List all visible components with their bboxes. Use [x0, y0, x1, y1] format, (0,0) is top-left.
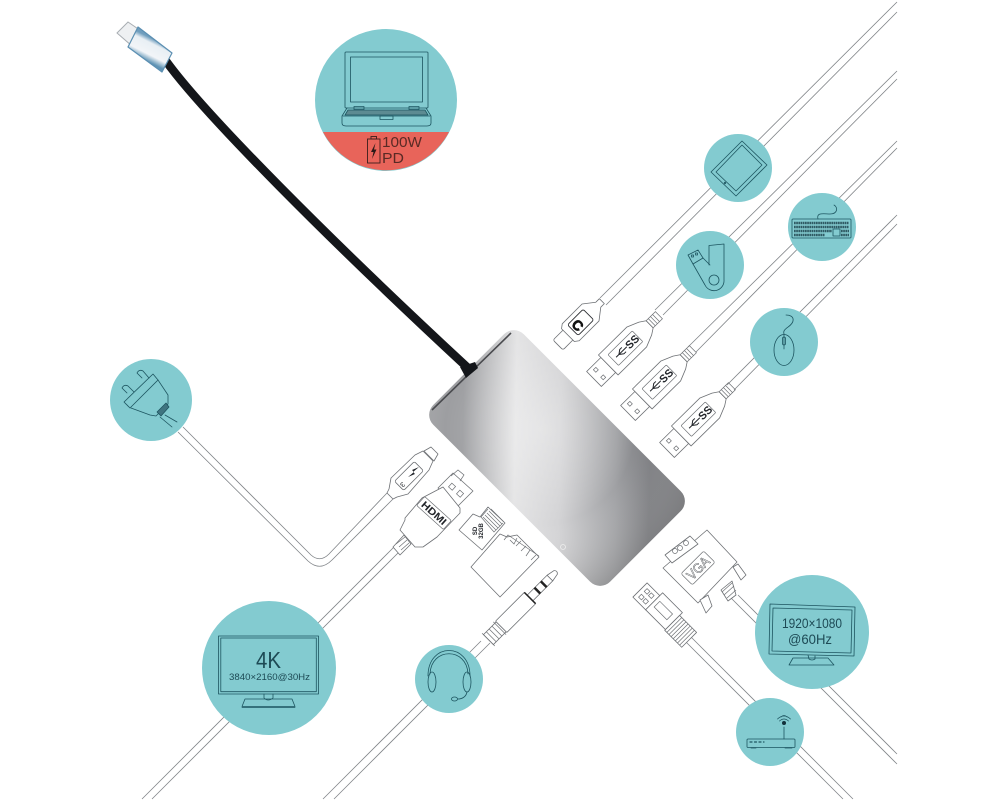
label: HDMI: HDMI: [419, 500, 448, 528]
SD card: [471, 534, 539, 597]
USB-C black cable: [166, 61, 468, 368]
Thunderbolt 3 plug: [387, 447, 438, 499]
resolution label: 3840×2160@30Hz: [229, 672, 310, 683]
icon: power plug: [122, 370, 177, 427]
router antenna dot: [782, 721, 786, 725]
power label: PD: [382, 150, 404, 167]
icon: headset: [428, 650, 471, 701]
power delivery band: [323, 132, 449, 170]
cable wires: USB flash port: [655, 71, 897, 315]
icon: keyboard: [792, 205, 851, 238]
badge: USB flash drive: [676, 231, 744, 299]
microSD card: [459, 507, 505, 550]
resolution label: @60Hz: [788, 631, 832, 647]
USB 3.0 plug: keyboard: SS: [657, 367, 676, 386]
badge: mouse: [750, 308, 818, 376]
USB-C plug: [550, 293, 610, 353]
icon: router: [747, 716, 795, 748]
icon: lightning bolt: [408, 467, 419, 477]
badge: 4K monitor: [202, 601, 336, 735]
badge: keyboard: [788, 193, 856, 261]
cable wires: mouse port: [727, 215, 897, 390]
badge: power plug: [110, 359, 192, 441]
resolution label: [229, 647, 310, 683]
resolution label: 1920×1080: [782, 615, 842, 631]
label: 3: 3: [398, 480, 406, 488]
VGA plug: [663, 530, 746, 613]
label: VGA: VGA: [683, 553, 713, 583]
badge: tablet: [704, 134, 772, 202]
cable wires: HDMI: [142, 546, 402, 799]
label: microSD 32GB: 32GB: [479, 523, 485, 539]
cable wires: power input: [178, 427, 393, 566]
cable wires: keyboard port: [688, 141, 897, 352]
icon: monitor: [218, 636, 318, 708]
USB-C plug: C: [569, 316, 587, 334]
icon: battery: [368, 136, 380, 163]
label: microSD 32GB: [473, 523, 485, 539]
audio jack plug: [482, 565, 563, 646]
USB 3.0 plug: keyboard: [618, 339, 703, 423]
hub body: [423, 324, 691, 592]
cable wires: VGA: [730, 595, 897, 764]
icon: monitor: [769, 604, 855, 665]
USB 3.0 plug: mouse: SS: [696, 404, 715, 423]
badge: 1080p monitor: [755, 575, 869, 689]
USB 3.0 plug: flash drive: [584, 305, 669, 389]
power label: [382, 134, 423, 167]
USB-C connector: [117, 22, 172, 72]
cable wires: tablet port: [600, 2, 897, 305]
USB 3.0 plug: mouse: [657, 376, 742, 460]
laptop badge: [315, 29, 457, 171]
badge: router: [736, 698, 804, 766]
icon: tablet: [711, 141, 767, 196]
HDMI plug: [393, 470, 473, 555]
icon: flash drive: [688, 244, 724, 291]
resolution label: [782, 615, 842, 647]
cable wires: headset: [323, 641, 490, 799]
icon: mouse: [774, 315, 794, 366]
power label: 100W: [382, 134, 423, 151]
icon: laptop: [342, 52, 431, 126]
resolution label: 4K: [256, 647, 282, 673]
ethernet plug: [632, 580, 699, 647]
USB 3.0 plug: flash drive: SS: [623, 333, 642, 352]
cable wires: ethernet: [683, 636, 853, 799]
label: microSD 32GB: SD: [473, 526, 479, 535]
badge: headset: [415, 645, 483, 713]
